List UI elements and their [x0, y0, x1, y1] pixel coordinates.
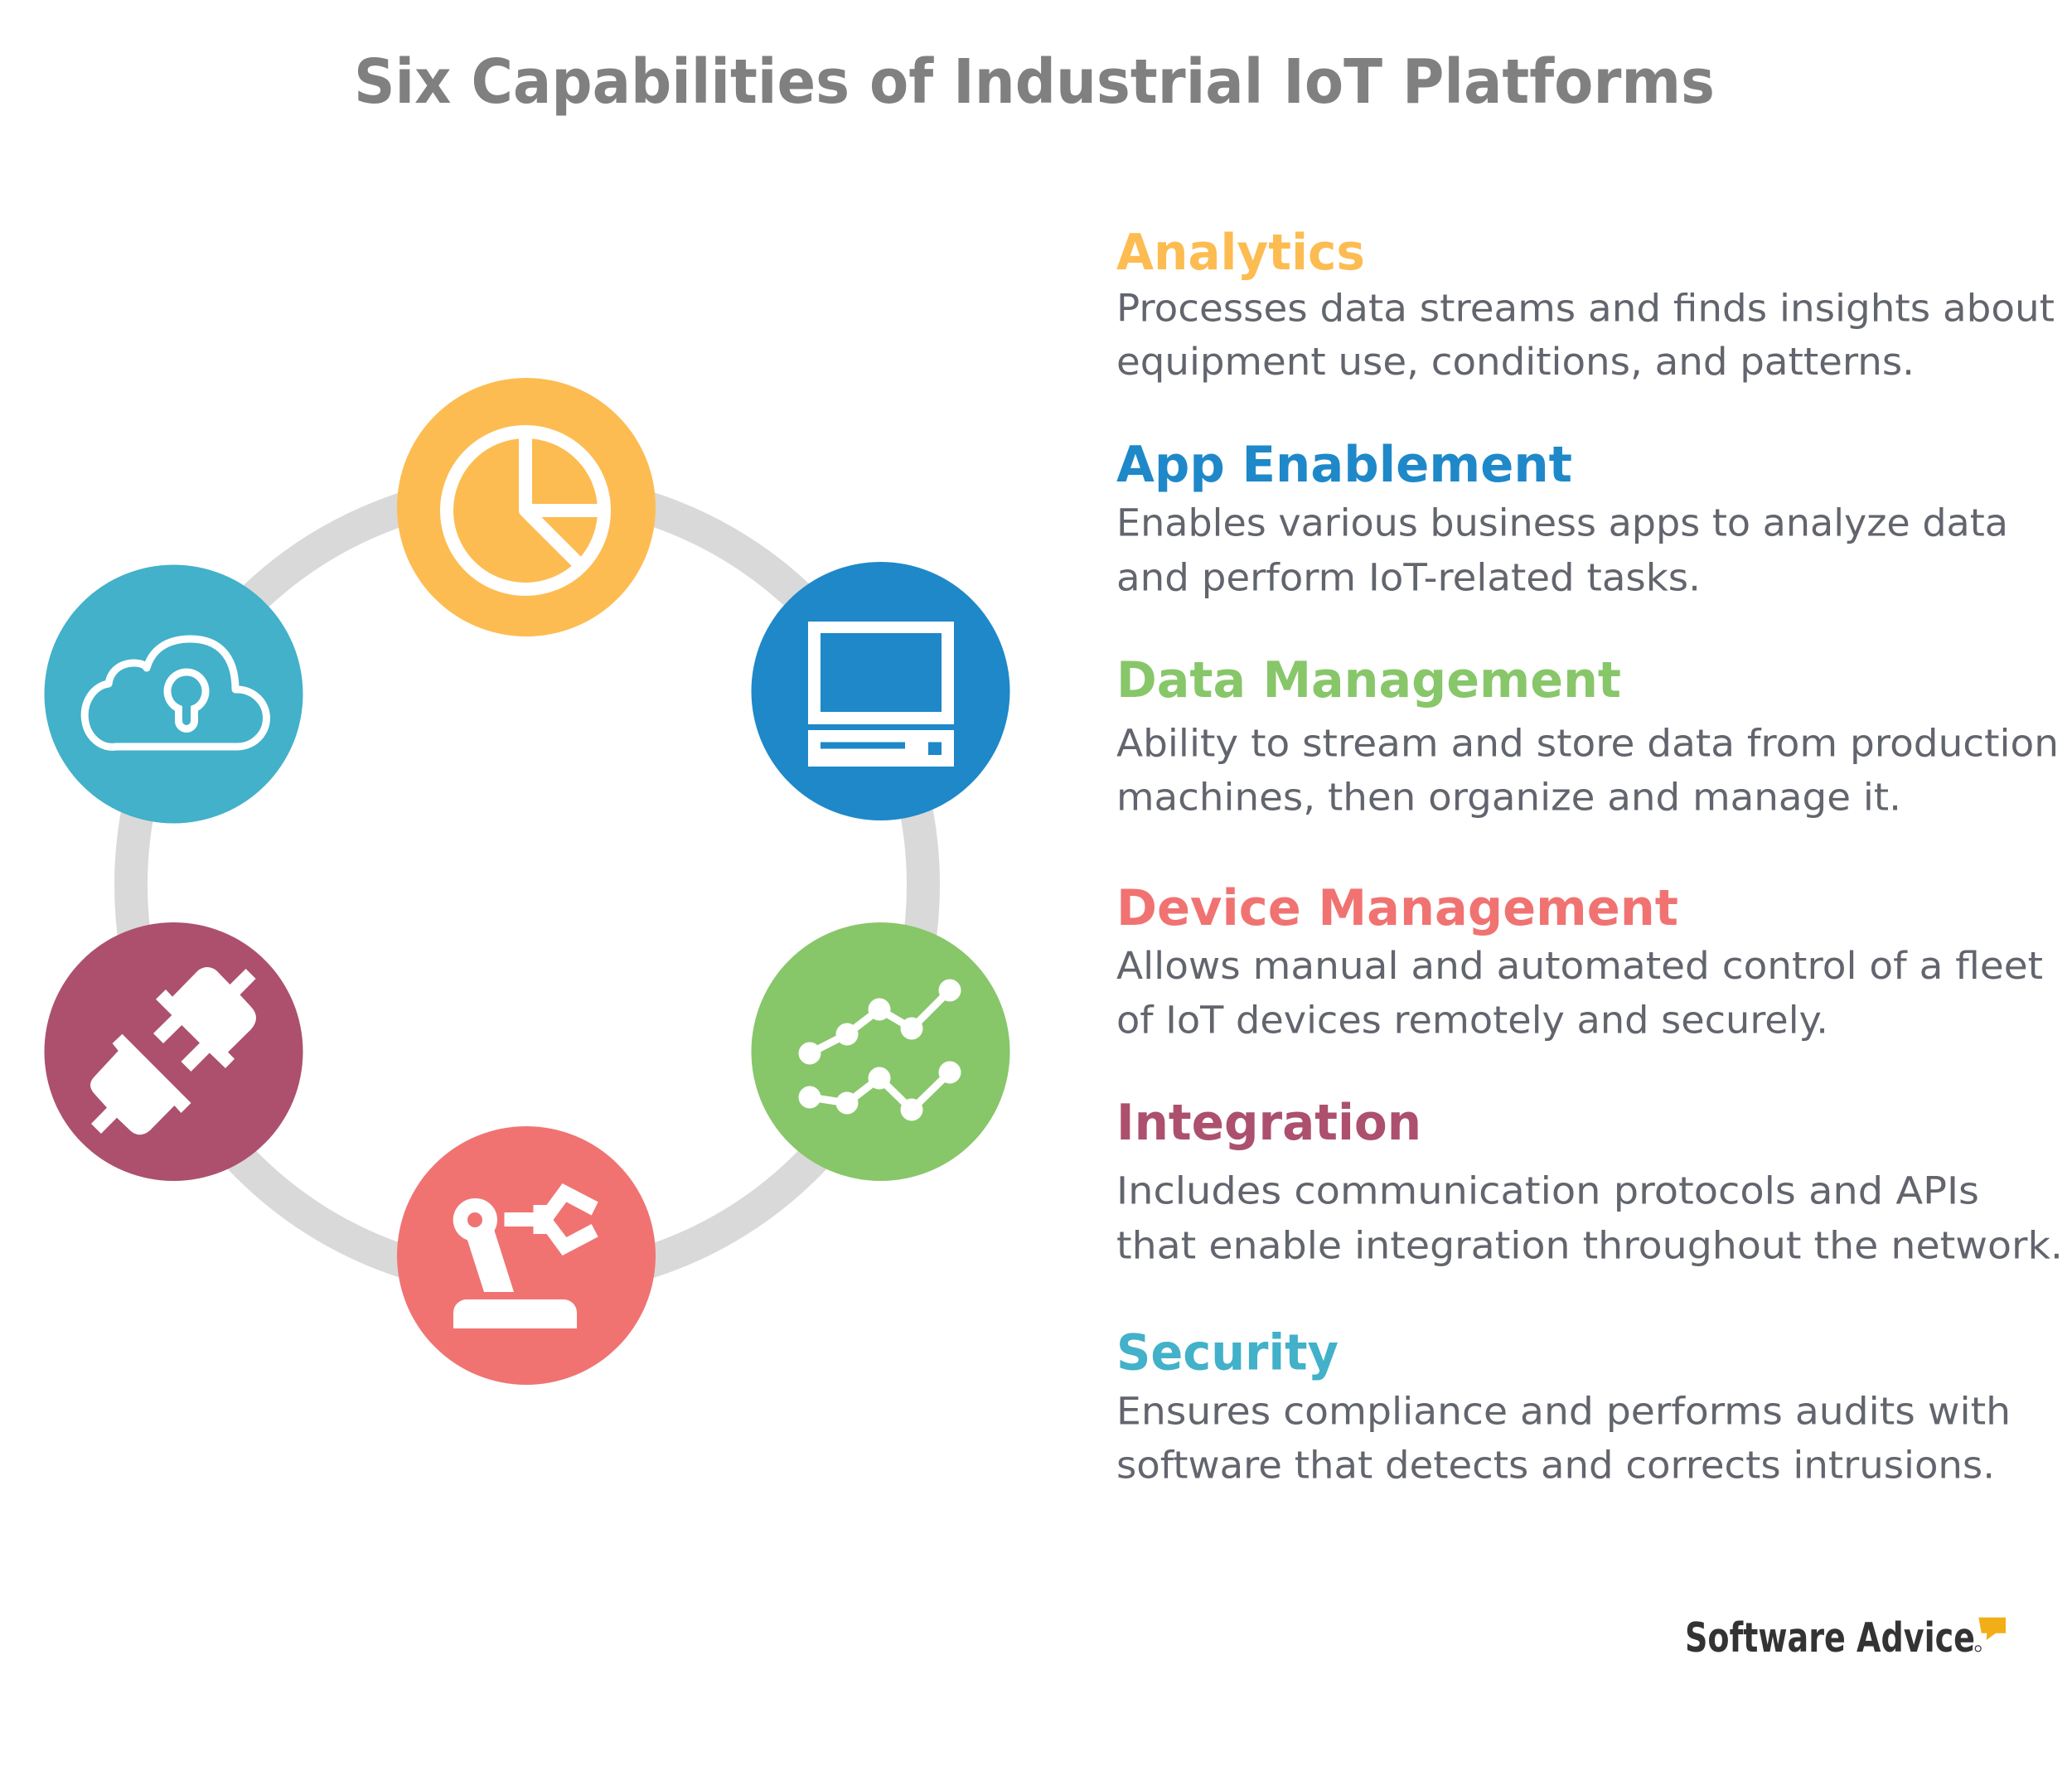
description: security: Ensures compliance and performs audits with [1116, 1390, 2011, 1434]
heading: analytics: Analytics [1116, 224, 1365, 282]
logo: Software Advice: Software Advice [1685, 1614, 1975, 1662]
description: app enablement: and perform IoT-related tasks. [1116, 556, 1701, 600]
description: security: software that detects and corrects intrusions. [1116, 1444, 1995, 1488]
description: integration [1116, 1169, 2063, 1268]
node: security cloud with keyhole [45, 565, 303, 824]
description: device management [1116, 944, 2043, 1043]
text block: data management [1116, 651, 2059, 819]
text block: app enablement [1116, 436, 2008, 600]
description: analytics: Processes data streams and finds insights about [1116, 287, 2055, 331]
description: data management: machines, then organize and manage it. [1116, 775, 1901, 819]
description: device management: of IoT devices remotely and securely. [1116, 999, 1828, 1043]
title: Six Capabilities of Industrial IoT Platforms [354, 46, 1715, 118]
description: analytics [1116, 287, 2055, 384]
heading: security: Security [1116, 1323, 1339, 1381]
node: integration plugs [45, 922, 303, 1181]
description: device management: Allows manual and automated control of a fleet [1116, 944, 2043, 988]
description: integration: that enable integration throughout the network. [1116, 1224, 2063, 1268]
description: security [1116, 1390, 2011, 1488]
text block: device management [1116, 879, 2043, 1043]
heading: integration: Integration [1116, 1094, 1421, 1152]
node: data management line charts [751, 922, 1009, 1181]
description: analytics: equipment use, conditions, and patterns. [1116, 340, 1915, 384]
description: app enablement: Enables various business apps to analyze data [1116, 501, 2008, 544]
heading: data management: Data Management [1116, 651, 1621, 709]
text block: security [1116, 1323, 2011, 1488]
description: data management [1116, 722, 2059, 819]
description: data management: Ability to stream and store data from production [1116, 722, 2059, 766]
text block: integration [1116, 1094, 2063, 1268]
heading: app enablement: App Enablement [1116, 436, 1572, 494]
heading: device management: Device Management [1116, 879, 1678, 937]
grey ring connecting the capabilities [131, 489, 923, 1281]
description: integration: Includes communication protocols and APIs [1116, 1169, 1979, 1213]
node: analytics pie chart [397, 378, 656, 636]
node: app enablement computer [751, 562, 1009, 820]
node: device management robot arm [397, 1126, 656, 1385]
text block: analytics [1116, 224, 2055, 384]
description: app enablement [1116, 501, 2008, 600]
